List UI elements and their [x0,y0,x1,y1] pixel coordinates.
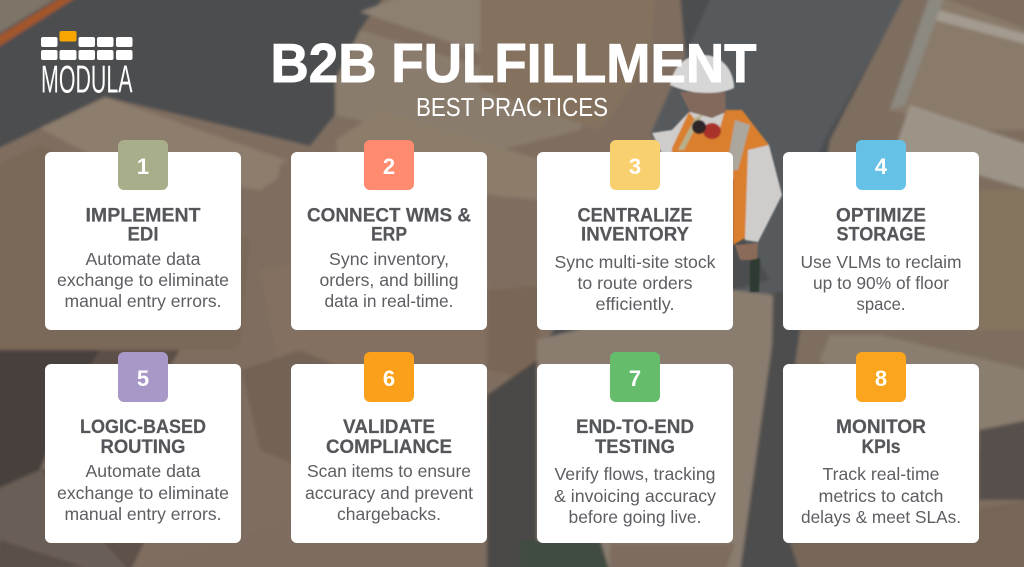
heading 6: VALIDATE [343,417,435,438]
text 3 [554,252,716,314]
shirt and sleeve [652,112,782,242]
right boxes [790,0,1024,567]
face [680,92,726,118]
panel: 1 implement EDI [45,140,241,330]
text 1: manual entry errors. [64,291,222,311]
badge 1 [118,140,168,190]
badge 6 [364,352,414,402]
badge 4: 4 [875,154,888,179]
heading 1: IMPLEMENT [86,206,201,226]
heading 4: STORAGE [836,224,926,246]
badge 8: 8 [875,366,887,391]
text 8 [801,464,961,527]
logo wordmark: MODULA [41,58,132,102]
badge 7: 7 [629,366,641,391]
text 1: exchange to eliminate [57,270,229,290]
text 6: accuracy and prevent [305,483,473,503]
heading 5: LOGIC-BASED [80,417,206,438]
badge 3: 3 [629,154,641,179]
text 8: metrics to catch [818,486,944,506]
heading 5: ROUTING [100,437,186,458]
text 5: exchange to eliminate [57,483,229,503]
text 4: space. [856,294,906,314]
heading 2 [307,206,471,246]
text 2 [320,249,458,311]
badge 5: 5 [137,366,149,391]
heading 4 [836,206,926,246]
heading 3: INVENTORY [581,224,689,246]
text 8: delays & meet SLAs. [801,507,961,527]
badge 4 [856,140,906,190]
logo orange block [60,31,76,42]
hand [735,243,758,260]
worker [652,55,782,292]
text 4 [800,252,962,314]
heading 1 [86,206,201,246]
heading 7: TESTING [595,437,675,458]
logo blocks [41,37,132,60]
text 6: Scan items to ensure [307,461,471,481]
text 3: Sync multi-site stock [554,252,716,272]
top-left shelf [0,0,62,36]
text 8: Track real-time [822,464,940,484]
heading 2: ERP [371,224,407,246]
title: B2B FULFILLMENT [270,32,756,94]
text 3: to route orders [578,273,693,293]
heading 1: EDI [128,224,158,246]
badge 1: 1 [137,154,149,179]
badge 5 [118,352,168,402]
left box stack [0,97,310,567]
panel: 8 monitor KPIs [783,352,979,543]
text 2: data in real-time. [324,291,454,311]
text 5: Automate data [86,461,201,481]
badge 7 [610,352,660,402]
text 7: Verify flows, tracking [554,464,716,484]
heading 3: CENTRALIZE [578,206,692,226]
text 4: Use VLMs to reclaim [800,252,962,272]
text 2: orders, and billing [320,270,458,290]
right floor [650,0,905,400]
badge 8 [856,352,906,402]
heading 5 [80,417,206,458]
heading 8 [836,417,926,458]
badge 6: 6 [383,366,395,391]
text 6 [305,461,473,524]
badge 3 [610,140,660,190]
text 1: Automate data [86,249,201,269]
heading 7: END-TO-END [576,417,694,438]
heading 6: COMPLIANCE [326,437,452,458]
cart handle [750,258,760,292]
heading 2: CONNECT WMS & [307,206,471,226]
logo [41,31,132,102]
heading 4: OPTIMIZE [836,206,926,226]
heading 3 [578,206,692,246]
hard hat [670,55,734,93]
heading 8: MONITOR [836,417,926,438]
badge 2: 2 [383,154,395,179]
heading 7 [576,417,694,458]
text 2: Sync inventory, [329,249,449,269]
text 1 [57,249,229,311]
text 6: chargebacks. [337,504,441,524]
text 5: manual entry errors. [64,504,222,524]
vest [672,110,769,245]
text 7: before going live. [568,507,702,527]
panel: 3 centralize inventory [537,140,733,330]
text 7 [554,464,716,527]
centre boxes [130,0,690,567]
text 5 [57,461,229,524]
panel: 2 connect WMS and ERP [291,140,487,330]
panel: 6 validate compliance [291,352,487,543]
text 4: up to 90% of floor [813,273,949,293]
heading 6 [326,417,452,458]
ear defenders [703,123,721,139]
badge 2 [364,140,414,190]
subtitle: BEST PRACTICES [416,92,608,122]
panel: 5 logic-based routing [45,352,241,543]
panel: 4 optimize storage [783,140,979,330]
box by worker [537,290,773,567]
text 3: efficiently. [596,294,674,314]
text 7: & invoicing accuracy [554,486,716,506]
heading 8: KPIs [862,437,900,458]
panel: 7 end-to-end testing [537,352,733,543]
